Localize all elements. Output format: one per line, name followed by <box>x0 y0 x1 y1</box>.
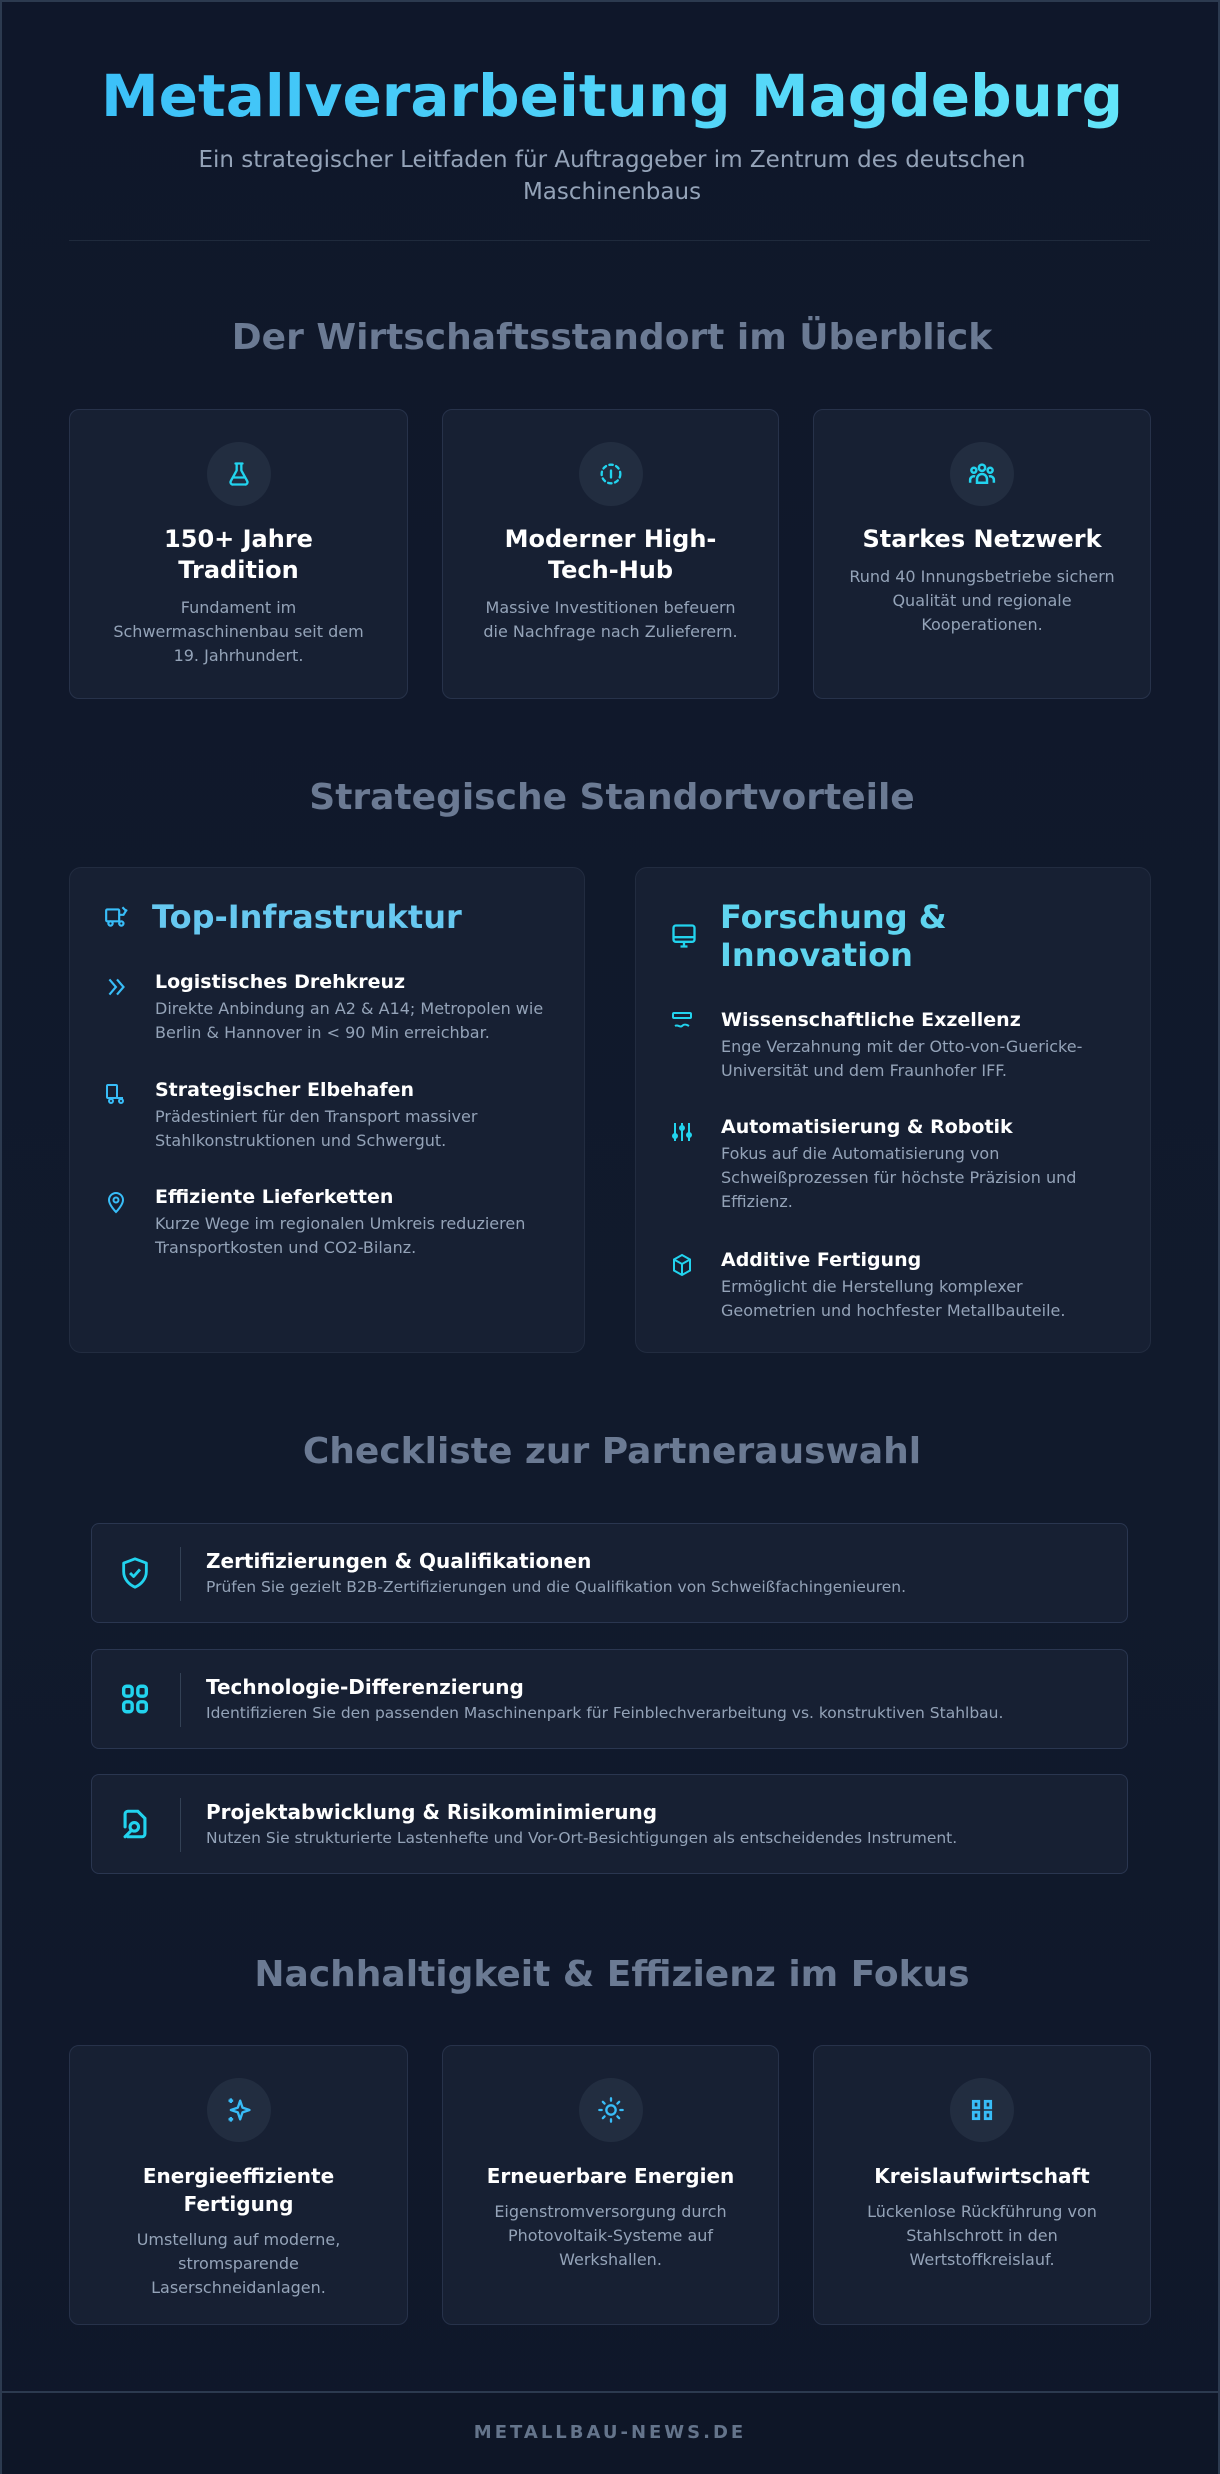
item: Logistisches Drehkreuz: Logistisches Drehkreuz <box>155 971 405 993</box>
card text: Fundament im Schwermaschinenbau seit dem 19. Jahrhundert. <box>113 598 364 665</box>
card: Energieeffiziente Fertigung <box>69 2045 408 2325</box>
icon: squares <box>950 2078 1014 2142</box>
icon: file search <box>123 1810 146 1838</box>
icon: sparkles <box>206 2078 270 2142</box>
item: Exzellenz <box>672 1009 1082 1080</box>
panel title: Top-Infrastruktur <box>152 898 462 936</box>
card: High-Tech-Hub <box>442 409 779 699</box>
panel: Top-Infrastruktur <box>69 867 585 1353</box>
panel title <box>672 898 947 974</box>
footer <box>2 2391 1218 2474</box>
item: Additive Fertigung: Ermöglicht die Herstellung komplexer Geometrien und hochfester Metallbauteile. <box>721 1277 1065 1320</box>
icon: people <box>950 442 1014 506</box>
item: Additive Fertigung: Additive Fertigung <box>721 1249 921 1271</box>
icon: grid <box>122 1684 148 1714</box>
item: Automatisierung <box>672 1116 1076 1211</box>
panel title: Innovation <box>720 936 913 974</box>
card title: Starkes Netzwerk <box>862 525 1102 553</box>
icon: sun <box>578 2078 642 2142</box>
checklist item: Technologie: Technologie-Differenzierung <box>206 1675 524 1699</box>
checklist item: Projektabwicklung <box>91 1774 1128 1874</box>
checklist item: Zertifizierungen: Zertifizierungen & Qualifikationen <box>206 1549 591 1573</box>
heading: Checkliste: Checkliste zur Partnerauswahl <box>303 1431 921 1472</box>
checklist item: Projektabwicklung: Nutzen Sie strukturierte Lastenhefte und Vor-Ort-Besichtigungen als entscheidendes Instrument. <box>206 1829 957 1847</box>
checklist item: Zertifizierungen <box>91 1523 1128 1623</box>
item: Lieferketten <box>108 1186 525 1257</box>
card text: Rund 40 Innungsbetriebe sichern Qualität und regionale Kooperationen. <box>849 567 1115 634</box>
card title: Moderner High-Tech-Hub <box>505 525 716 584</box>
item: Elbehafen: Prädestiniert für den Transport massiver Stahlkonstruktionen und Schwergut. <box>155 1107 477 1150</box>
card: Tradition <box>69 409 408 699</box>
checklist item: Zertifizierungen: Prüfen Sie gezielt B2B-Zertifizierungen und die Qualifikation von Schweißfachingenieuren. <box>206 1578 906 1596</box>
checklist item: Technologie <box>91 1649 1128 1749</box>
card text: Umstellung auf moderne, stromsparende Laserschneidanlagen. <box>137 2230 340 2297</box>
item: Exzellenz: Wissenschaftliche Exzellenz <box>721 1009 1021 1031</box>
heading: Wirtschaftsstandort: Der Wirtschaftsstandort im Überblick <box>232 317 992 358</box>
card: Erneuerbare Energien <box>442 2045 779 2325</box>
item: Elbehafen <box>106 1079 478 1150</box>
item: Lieferketten: Effiziente Lieferketten <box>155 1186 393 1208</box>
item: Automatisierung: Automatisierung & Robotik <box>721 1116 1013 1138</box>
item: Additive Fertigung <box>673 1249 1065 1320</box>
item: Exzellenz: Enge Verzahnung mit der Otto-von-Guericke-Universität und dem Fraunhofer IFF. <box>721 1037 1082 1080</box>
card title: Energieeffiziente Fertigung <box>143 2164 334 2216</box>
checklist item: Technologie: Identifizieren Sie den passenden Maschinenpark für Feinblechverarbeitung vs. konstruktiven Stahlbau. <box>206 1704 1003 1722</box>
icon: focus <box>578 442 642 506</box>
item: Elbehafen: Strategischer Elbehafen <box>155 1079 414 1101</box>
title: Metallverarbeitung Magdeburg <box>101 62 1123 130</box>
card: Kreislaufwirtschaft <box>813 2045 1151 2325</box>
item: Automatisierung: Fokus auf die Automatisierung von Schweißprozessen für höchste Präzision und Effizienz. <box>721 1144 1076 1211</box>
panel title: Forschung & <box>720 898 947 936</box>
card title: Erneuerbare Energien <box>487 2164 734 2188</box>
card: Netzwerk <box>813 409 1151 699</box>
item: Logistisches Drehkreuz <box>108 971 543 1042</box>
card title: Kreislaufwirtschaft <box>874 2164 1090 2188</box>
card title: 150+ Jahre Tradition <box>164 525 313 584</box>
heading: Standortvorteile: Strategische Standortvorteile <box>309 777 915 818</box>
panel: Forschung & Innovation <box>635 867 1151 1353</box>
item: Lieferketten: Kurze Wege im regionalen Umkreis reduzieren Transportkosten und CO2-Bilanz. <box>155 1214 525 1257</box>
checklist item: Projektabwicklung: Projektabwicklung & Risikominimierung <box>206 1800 657 1824</box>
item: Logistisches Drehkreuz: Direkte Anbindung an A2 & A14; Metropolen wie Berlin & Hannover in < 90 Min erreichbar. <box>155 999 543 1042</box>
icon: flask <box>206 442 270 506</box>
card text: Eigenstromversorgung durch Photovoltaik-Systeme auf Werkshallen. <box>494 2202 727 2269</box>
footer: METALLBAU-NEWS.DE <box>474 2422 746 2443</box>
icon: shield <box>122 1557 148 1589</box>
heading: Nachhaltigkeit: Nachhaltigkeit & Effizienz im Fokus <box>254 1954 970 1995</box>
card text: Massive Investitionen befeuern die Nachfrage nach Zulieferern. <box>483 598 738 641</box>
card text: Lückenlose Rückführung von Stahlschrott in den Wertstoffkreislauf. <box>867 2202 1097 2269</box>
subtitle: Ein strategischer Leitfaden für Auftraggeber im Zentrum des deutschen Maschinenbaus <box>198 147 1026 205</box>
